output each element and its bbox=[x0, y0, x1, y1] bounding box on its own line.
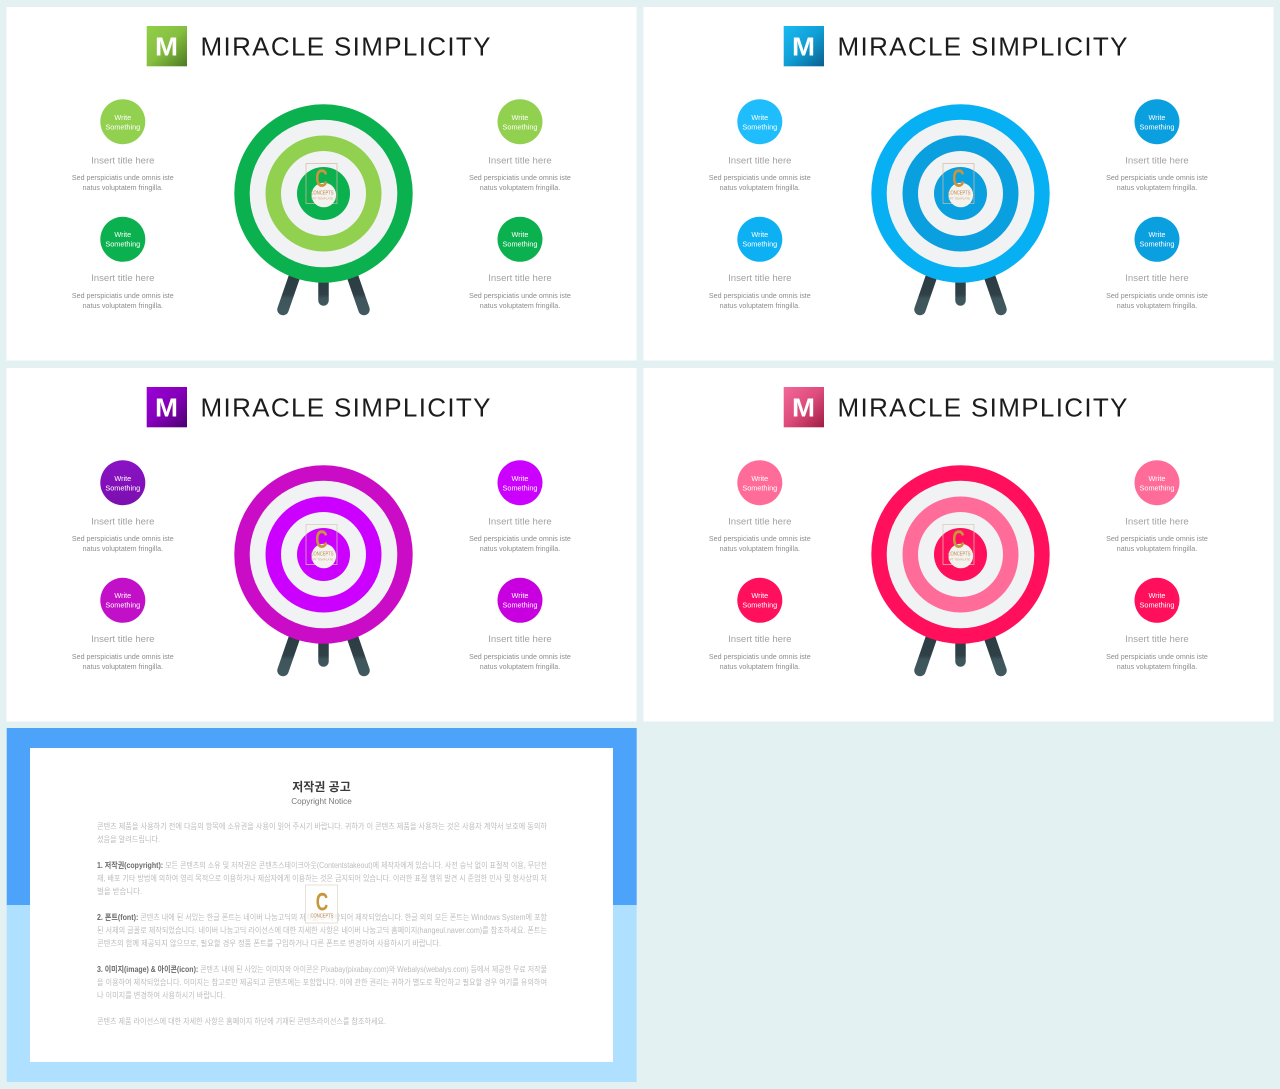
callout: bottom left: natus voluptatem fringilla. bbox=[83, 302, 163, 310]
callout: top left bbox=[72, 99, 174, 192]
callout: bottom left bbox=[72, 217, 174, 310]
text block: font clause: 2. 폰트(font): 콘텐츠 내에 된 서있는 한글 폰트는 네이버 나눔고딕의 저작물로 제작되어 제작되었습니다. 한글 외의 모든 폰트는 Windows System에 포함 bbox=[97, 912, 548, 922]
text block: font clause bbox=[97, 912, 548, 948]
callout: bottom right: Sed perspiciatis unde omnis iste bbox=[469, 653, 571, 661]
icon: pink target on stand bbox=[871, 465, 1050, 670]
icon: watermark logo: C bbox=[952, 165, 965, 193]
callout: bottom left: Sed perspiciatis unde omnis iste bbox=[709, 653, 811, 661]
callout: bottom left: Sed perspiciatis unde omnis iste bbox=[72, 653, 174, 661]
icon: watermark logo bbox=[306, 524, 337, 568]
callout: top left: Insert title here bbox=[728, 156, 792, 166]
callout: top left: Write bbox=[751, 113, 768, 122]
text block: copyright clause: 1. 저작권(copyright): 모든 콘텐츠의 소유 및 저작권은 콘텐츠스테이크아웃(Contentstakeout)에 제작자에게 있습니다. 사전 승낙 없이 표절적 이용, 무단전 bbox=[97, 860, 547, 870]
callout: bottom left: Insert title here bbox=[91, 634, 155, 645]
icon: watermark logo: C bbox=[315, 165, 328, 193]
panel: pink target slide bbox=[644, 368, 1274, 722]
text block: image and icon clause: 3. 이미지(image) & 아이콘(icon): 콘텐츠 내에 된 사있는 이미지와 아이콘은 Pixabay(pixabay.com)와 Webalys(webalys.com) 등에서 제공한 무료 저작물 bbox=[97, 964, 547, 974]
callout: bottom left: Write bbox=[751, 230, 768, 239]
callout: bottom left: Something bbox=[742, 240, 777, 248]
heading: purple: MIRACLE SIMPLICITY bbox=[200, 393, 490, 423]
heading: purple: M bbox=[155, 393, 178, 423]
callout: top left: Something bbox=[105, 484, 140, 492]
callout: bottom right: natus voluptatem fringilla. bbox=[480, 302, 560, 310]
callout: bottom right: Something bbox=[503, 240, 537, 248]
text block: copyright clause: 재, 배포 기타 방법에 의하여 영리 목적으로 이용하거나 제삼자에게 이용하는 것은 금지되어 있습니다. 이러한 표절 행위 발견 시 준엄한 민사 및 형사상의 처 bbox=[97, 873, 547, 883]
icon: watermark logo: PPT TEMPLATE bbox=[311, 558, 333, 562]
callout: top left: Sed perspiciatis unde omnis iste bbox=[709, 535, 811, 543]
callout: top left: natus voluptatem fringilla. bbox=[83, 184, 163, 192]
text block: intro: 셨음을 알려드립니다. bbox=[97, 834, 160, 844]
callout: bottom left bbox=[709, 217, 811, 310]
panel: copyright notice bbox=[7, 728, 637, 1082]
heading: copyright title bbox=[291, 779, 352, 806]
icon: watermark logo: C bbox=[952, 526, 965, 554]
callout: bottom right: Insert title here bbox=[488, 634, 552, 645]
text block: font clause: 된 서체의 글꼴로 제작되었습니다. 네이버 나눔고딕 라이선스에 대한 자세한 사항은 네이버 나눔고딕 홈페이지(hangeul.naver.com)를 참조하세요. 폰트는 bbox=[97, 925, 547, 935]
callout: top left: natus voluptatem fringilla. bbox=[720, 545, 800, 553]
callout: bottom left: Sed perspiciatis unde omnis iste bbox=[709, 292, 811, 300]
callout: bottom right: Something bbox=[1140, 240, 1174, 248]
callout: top left: Write bbox=[114, 474, 131, 483]
text block: copyright clause bbox=[97, 860, 547, 896]
heading: blue: MIRACLE SIMPLICITY bbox=[838, 32, 1128, 62]
callout: bottom right bbox=[1106, 578, 1208, 671]
heading: copyright title: 저작권 공고 bbox=[292, 779, 351, 794]
callout: bottom left: Insert title here bbox=[728, 273, 792, 284]
callout: top left: Something bbox=[742, 484, 777, 492]
icon: watermark logo: CONCEPTS bbox=[948, 190, 971, 196]
callout: bottom left: Sed perspiciatis unde omnis iste bbox=[72, 292, 174, 300]
callout: bottom right bbox=[469, 217, 571, 310]
icon: watermark logo: CONCEPTS bbox=[310, 552, 334, 558]
heading: pink: M bbox=[792, 393, 815, 423]
heading: blue: M bbox=[792, 32, 815, 62]
callout: top right: Sed perspiciatis unde omnis iste bbox=[469, 174, 571, 182]
callout: bottom right: Write bbox=[1149, 230, 1165, 239]
callout: top right: natus voluptatem fringilla. bbox=[480, 545, 560, 553]
panel: green target slide bbox=[6, 7, 636, 360]
icon: watermark logo: CONCEPTS bbox=[948, 552, 971, 558]
callout: bottom right: Insert title here bbox=[1125, 634, 1189, 645]
callout: bottom right: Something bbox=[503, 600, 537, 610]
panel: purple target slide bbox=[6, 368, 636, 722]
callout: top right bbox=[469, 99, 571, 192]
callout: top right: natus voluptatem fringilla. bbox=[1117, 184, 1197, 192]
icon: watermark logo bbox=[306, 164, 337, 207]
callout: top left: natus voluptatem fringilla. bbox=[720, 184, 800, 192]
text block: image and icon clause: 을 이용하여 제작되었습니다. 이미지는 참고로만 제공되고 콘텐츠에는 포함합니다. 이에 관한 권리는 귀하가 별도로 확인하고 필요할 경우 여기를 유의하여 bbox=[97, 977, 547, 987]
callout: bottom left: Write bbox=[114, 591, 131, 600]
icon: watermark logo: CONCEPTS bbox=[310, 190, 334, 196]
callout: top right: Insert title here bbox=[1125, 516, 1189, 528]
icon: watermark logo: C bbox=[316, 888, 328, 916]
callout: bottom left: Write bbox=[114, 230, 131, 239]
callout: top right: Write bbox=[512, 113, 528, 122]
callout: top left bbox=[709, 99, 811, 192]
callout: bottom right: Write bbox=[512, 591, 528, 600]
icon: blue target on stand bbox=[871, 104, 1050, 310]
callout: bottom left: Write bbox=[751, 591, 768, 600]
callout: bottom left: Something bbox=[105, 600, 140, 610]
callout: top right: Something bbox=[503, 122, 537, 132]
text block: image and icon clause bbox=[97, 964, 547, 1000]
heading: green: MIRACLE SIMPLICITY bbox=[200, 32, 490, 62]
icon: watermark logo bbox=[943, 164, 974, 207]
callout: top left: Write bbox=[751, 474, 768, 483]
callout: bottom left bbox=[709, 578, 811, 671]
callout: bottom right: Write bbox=[1149, 591, 1165, 600]
callout: top right: Write bbox=[1149, 113, 1165, 122]
icon: green target on stand bbox=[234, 104, 413, 310]
callout: top left: Insert title here bbox=[728, 516, 792, 528]
callout: top left: Insert title here bbox=[91, 156, 155, 166]
callout: top right: Write bbox=[1149, 474, 1165, 483]
text block: intro: 콘텐츠 제품을 사용하기 전에 다음의 항목에 소유권을 사용이 읽어 주시기 바랍니다. 귀하가 이 콘텐츠 제품을 사용하는 것은 사용자 계약서 보호에 동의하 bbox=[97, 821, 548, 831]
heading: blue bbox=[784, 26, 1128, 66]
panel: blue target slide bbox=[644, 7, 1274, 360]
text block: font clause: 콘텐츠의 함께 제공되지 않으므로, 필요할 경우 정품 폰트를 구입하거나 다른 폰트로 변경하여 사용하시기 바랍니다. bbox=[97, 938, 441, 948]
heading: purple bbox=[147, 387, 490, 427]
callout: top right: Something bbox=[503, 484, 537, 492]
callout: bottom left: Insert title here bbox=[728, 634, 792, 645]
callout: bottom right: natus voluptatem fringilla. bbox=[1117, 663, 1197, 671]
callout: bottom left bbox=[72, 578, 174, 671]
callout: top left: natus voluptatem fringilla. bbox=[83, 545, 163, 553]
callout: bottom left: Something bbox=[105, 240, 140, 248]
callout: top right: Sed perspiciatis unde omnis iste bbox=[1106, 174, 1208, 182]
callout: top right bbox=[1106, 99, 1208, 192]
callout: top left bbox=[72, 460, 174, 553]
callout: top left: Sed perspiciatis unde omnis iste bbox=[709, 174, 811, 182]
callout: top right bbox=[469, 460, 571, 553]
text block: copyright clause: 벌을 받습니다. bbox=[97, 886, 142, 896]
callout: bottom right: Insert title here bbox=[1125, 273, 1189, 284]
callout: top right: Sed perspiciatis unde omnis iste bbox=[469, 535, 571, 543]
icon: purple target on stand bbox=[234, 465, 413, 670]
callout: bottom right: Sed perspiciatis unde omnis iste bbox=[469, 292, 571, 300]
callout: bottom right bbox=[1106, 217, 1208, 310]
callout: bottom right bbox=[469, 578, 571, 671]
callout: top right: Something bbox=[1140, 484, 1174, 492]
callout: bottom right: natus voluptatem fringilla. bbox=[1117, 302, 1197, 310]
icon: watermark logo bbox=[943, 524, 974, 568]
callout: top right: natus voluptatem fringilla. bbox=[480, 184, 560, 192]
icon: watermark logo: CONCEPTS bbox=[310, 914, 334, 920]
heading: copyright title: Copyright Notice bbox=[291, 797, 352, 806]
callout: bottom left: natus voluptatem fringilla. bbox=[720, 302, 800, 310]
callout: bottom left: natus voluptatem fringilla. bbox=[720, 663, 800, 671]
callout: top left: Write bbox=[114, 113, 131, 122]
callout: top right: Insert title here bbox=[1125, 156, 1189, 166]
callout: top right: Insert title here bbox=[488, 156, 552, 166]
heading: pink: MIRACLE SIMPLICITY bbox=[838, 393, 1128, 423]
callout: bottom left: Something bbox=[742, 600, 777, 610]
callout: bottom right: Write bbox=[512, 230, 528, 239]
callout: top right: Sed perspiciatis unde omnis iste bbox=[1106, 535, 1208, 543]
callout: top right: Write bbox=[512, 474, 528, 483]
callout: bottom left: Insert title here bbox=[91, 273, 155, 284]
callout: top right bbox=[1106, 460, 1208, 553]
text block: intro bbox=[97, 821, 548, 844]
icon: watermark logo: PPT TEMPLATE bbox=[311, 196, 333, 200]
callout: top left: Something bbox=[742, 122, 777, 132]
heading: green bbox=[147, 26, 490, 66]
callout: bottom right: Something bbox=[1140, 600, 1174, 610]
callout: top right: Something bbox=[1140, 122, 1174, 132]
text block: image and icon clause: 나 이미지를 변경하여 사용하시기 바랍니다. bbox=[97, 990, 225, 1000]
callout: top left: Something bbox=[105, 122, 140, 132]
text block: license note: 콘텐츠 제품 라이선스에 대한 자세한 사항은 홈페이지 하단에 기재된 콘텐츠라이선스를 참조하세요. bbox=[97, 1016, 386, 1026]
heading: green: M bbox=[155, 32, 178, 62]
callout: bottom right: Sed perspiciatis unde omnis iste bbox=[1106, 292, 1208, 300]
callout: top left bbox=[709, 460, 811, 553]
icon: watermark logo: C bbox=[315, 526, 328, 554]
icon: watermark logo: PPT TEMPLATE bbox=[948, 558, 970, 562]
icon: watermark logo: PPT TEMPLATE bbox=[948, 196, 970, 200]
callout: bottom right: Sed perspiciatis unde omnis iste bbox=[1106, 653, 1208, 661]
callout: top left: Sed perspiciatis unde omnis iste bbox=[72, 535, 174, 543]
callout: bottom right: natus voluptatem fringilla. bbox=[480, 663, 560, 671]
callout: top right: Insert title here bbox=[488, 516, 552, 528]
callout: top left: Sed perspiciatis unde omnis iste bbox=[72, 174, 174, 182]
heading: pink bbox=[784, 387, 1128, 427]
callout: top left: Insert title here bbox=[91, 516, 155, 528]
callout: bottom left: natus voluptatem fringilla. bbox=[83, 663, 163, 671]
icon: watermark logo bbox=[306, 885, 338, 923]
callout: top right: natus voluptatem fringilla. bbox=[1117, 545, 1197, 553]
callout: bottom right: Insert title here bbox=[488, 273, 552, 284]
